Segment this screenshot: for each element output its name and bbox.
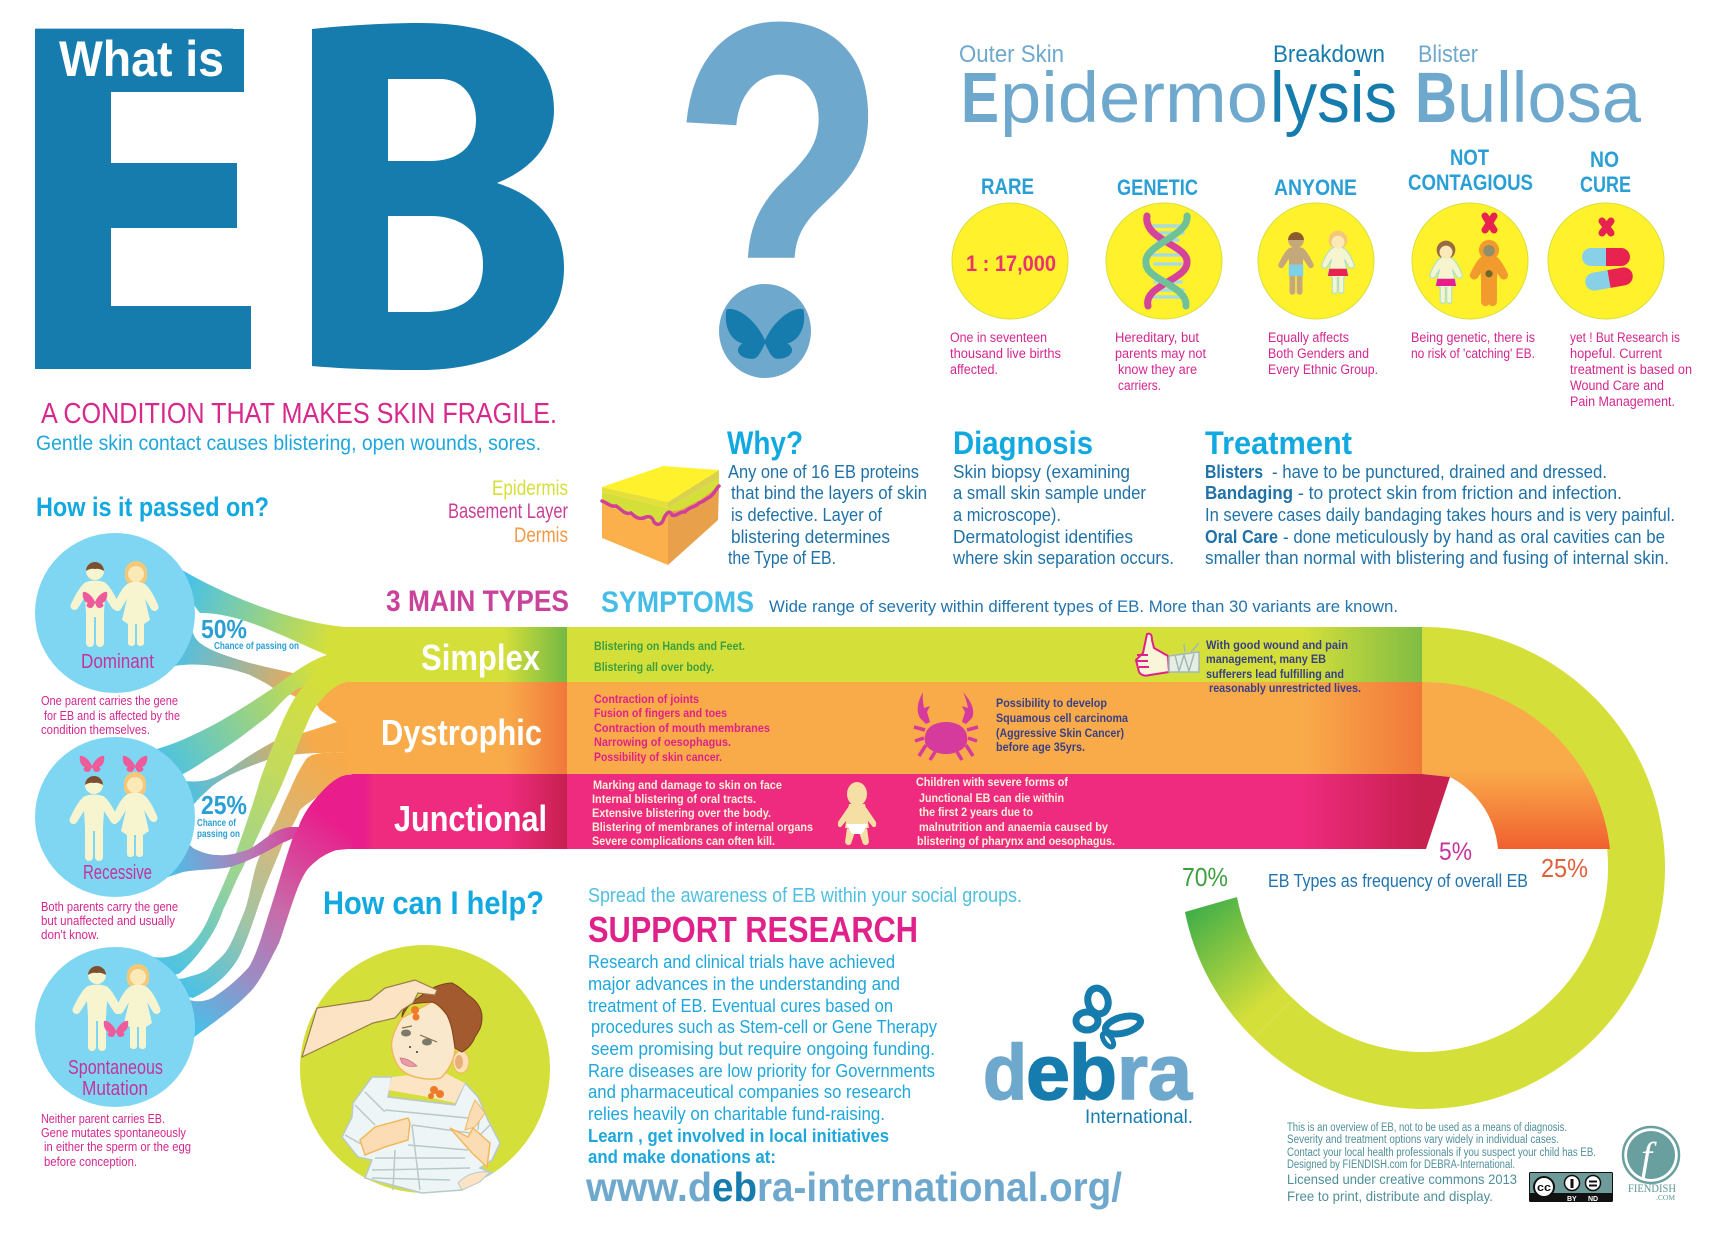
wordmark: d — [983, 1028, 1027, 1116]
headings: 3 main types and symptoms: SYMPTOMS — [601, 586, 754, 619]
disclaimer and licence: Free to print, distribute and display. — [1287, 1188, 1493, 1204]
caption: dominant: for EB and is affected by the — [44, 708, 180, 723]
body text: major advances in the understanding and — [588, 973, 900, 994]
note: good management — [1206, 638, 1361, 695]
box: What is: What is — [59, 31, 224, 87]
fact: no cure: yet ! But Research is — [1570, 330, 1680, 345]
meaning labels: Breakdown — [1273, 41, 1385, 68]
disclaimer and licence: Licensed under creative commons 2013 — [1287, 1171, 1517, 1187]
body text: Learn , get involved in local initiatives — [588, 1125, 889, 1146]
fact: anyone: ANYONE — [1274, 175, 1357, 200]
fact: no cure: CURE — [1580, 172, 1631, 197]
panel: Why?: Any one of 16 EB proteins — [728, 462, 919, 482]
website address: eb — [712, 1164, 757, 1210]
circle: dominant — [35, 533, 195, 693]
skin layer legend — [448, 477, 568, 547]
note: severe forms: Children with severe forms of — [916, 775, 1069, 789]
panel: Treatment: Bandaging — [1205, 483, 1293, 503]
icon: crab — [914, 692, 978, 760]
junctional symptoms — [592, 778, 813, 848]
tagline: Gentle skin contact causes blistering, open wounds, sores. — [36, 432, 541, 455]
dystrophic symptoms: Contraction of mouth membranes — [594, 721, 770, 735]
panel: Treatment: - have to be punctured, drained and dressed. — [1272, 462, 1607, 482]
panel: Why?: blistering determines — [731, 527, 890, 547]
fact: genetic: GENETIC — [1117, 175, 1198, 200]
body text: relies heavily on charitable fund-raising. — [588, 1103, 885, 1124]
dystrophic symptoms: Narrowing of oesophagus. — [594, 735, 731, 749]
website address — [585, 1164, 1122, 1210]
tagline: A CONDITION THAT MAKES SKIN FRAGILE. — [41, 398, 557, 430]
junctional symptoms: Internal blistering of oral tracts. — [592, 792, 756, 806]
chance: 25%: 25% — [201, 790, 247, 820]
note: good management: reasonably unrestricted lives. — [1209, 681, 1361, 695]
caption: spontaneous: Gene mutates spontaneously — [41, 1125, 186, 1140]
logo: fiendish: .COM — [1656, 1194, 1676, 1202]
circle: recessive — [35, 737, 195, 897]
junctional symptoms: Marking and damage to skin on face — [593, 778, 782, 792]
caption: spontaneous: Neither parent carries EB. — [41, 1111, 165, 1126]
butterfly mark — [1076, 986, 1142, 1049]
panel: Treatment: - to protect skin from friction and infection. — [1298, 483, 1622, 503]
fact: no cure: hopeful. Current — [1570, 346, 1662, 361]
simplex symptoms: Blistering all over body. — [594, 660, 714, 674]
fact: anyone: Both Genders and — [1268, 346, 1369, 361]
note: cancer risk: before age 35yrs. — [996, 740, 1085, 754]
icon: thumbs up with bandage — [1136, 634, 1199, 676]
head — [391, 983, 482, 1099]
logo: fiendish: FIENDISH — [1628, 1181, 1676, 1195]
label: 25%: 25% — [1541, 853, 1588, 883]
full name: E — [961, 59, 999, 138]
website address: www.d — [585, 1164, 712, 1210]
panel: how can I help — [300, 885, 1122, 1210]
title: big EB letters — [14, 0, 564, 470]
fact: genetic: parents may not — [1115, 346, 1206, 361]
caption: spontaneous: in either the sperm or the egg — [44, 1139, 191, 1154]
fact: not contagious — [1408, 145, 1535, 361]
segment: dystrophic 25% — [1422, 682, 1610, 849]
segment: junctional 5% — [1422, 774, 1450, 849]
full name: B — [1415, 59, 1457, 138]
fact: rare: affected. — [950, 362, 998, 377]
band: Junctional — [352, 774, 1422, 849]
fact: no cure — [1548, 147, 1692, 409]
junctional symptoms: Severe complications can often kill. — [592, 834, 775, 848]
panel: Diagnosis — [952, 425, 1174, 568]
panel: Treatment: smaller than normal with blistering and fusing of internal skin. — [1205, 548, 1669, 568]
hands — [360, 1118, 490, 1167]
headings: 3 main types and symptoms: 3 MAIN TYPES — [386, 585, 569, 618]
caption: recessive: don't know. — [41, 927, 99, 942]
note: good management: With good wound and pain — [1206, 638, 1348, 652]
band: Simplex — [340, 627, 1422, 682]
panel: Diagnosis: Dermatologist identifies — [953, 527, 1133, 547]
full name: ullosa — [1457, 59, 1642, 138]
note: range of severity: Wide range of severity within different types of EB. More than 30 variants are known. — [769, 597, 1398, 616]
panel: Why?: the Type of EB. — [728, 548, 836, 568]
badge: creative commons: ND — [1588, 1196, 1598, 1203]
skin layer legend: Basement Layer — [448, 500, 568, 523]
dystrophic symptoms: Fusion of fingers and toes — [594, 706, 727, 720]
prompt: Spread the awareness of EB within your social groups. — [588, 885, 1022, 907]
icon: cross and pills — [1582, 221, 1634, 292]
circle: recessive: Recessive — [83, 862, 152, 884]
band: Simplex: Simplex — [421, 637, 540, 678]
badge: creative commons: BY — [1567, 1196, 1577, 1203]
headings: 3 main types and symptoms — [386, 585, 754, 619]
icon: child and hazmat suit — [1430, 216, 1507, 305]
full name: pidermo — [1000, 59, 1268, 138]
fact: not contagious: Being genetic, there is — [1411, 330, 1535, 345]
simplex symptoms: Blistering on Hands and Feet. — [594, 639, 745, 653]
circle: spontaneous mutation: Mutation — [82, 1078, 148, 1100]
body text: treatment of EB. Eventual cures based on — [588, 995, 893, 1016]
chance: 50%: 50% — [201, 614, 247, 644]
note: cancer risk: (Aggressive Skin Cancer) — [996, 726, 1124, 740]
panel: Why? — [727, 425, 927, 568]
badge: creative commons — [1529, 1172, 1613, 1203]
fact: rare: 1 : 17,000 — [966, 251, 1056, 276]
junctional symptoms: Blistering of membranes of internal organs — [592, 820, 813, 834]
adult arm — [302, 980, 437, 1057]
dystrophic symptoms — [594, 692, 770, 764]
fact: genetic: carriers. — [1118, 378, 1161, 393]
chance: 25%: Chance of — [197, 817, 236, 829]
heading: How is it passed on? — [36, 492, 269, 522]
note: cancer risk: Squamous cell carcinoma — [996, 711, 1128, 725]
logo: fiendish: f — [1641, 1134, 1657, 1179]
panel: Diagnosis: a small skin sample under — [953, 483, 1146, 503]
disclaimer and licence: This is an overview of EB, not to be used as a means of diagnosis. — [1287, 1122, 1567, 1134]
chance: 50%: Chance of passing on — [214, 640, 299, 652]
panel: how is it passed on — [35, 492, 360, 1169]
fact: no cure: Wound Care and — [1570, 378, 1664, 393]
disclaimer and licence: Contact your local health professionals if you suspect your child has EB. — [1287, 1147, 1596, 1159]
tagline — [36, 398, 557, 455]
fact: rare — [950, 174, 1068, 377]
logo: debra international: International. — [1085, 1107, 1193, 1128]
wordmark: ra — [1117, 1028, 1193, 1116]
body text: Research and clinical trials have achieved — [588, 951, 895, 972]
panel: Treatment: Treatment — [1205, 425, 1352, 461]
chance: 25%: passing on — [197, 828, 240, 840]
note: severe forms: Junctional EB can die within — [919, 791, 1064, 805]
icon: baby — [838, 782, 876, 845]
caption: spontaneous: before conception. — [44, 1154, 137, 1169]
note: good management: management, many EB — [1206, 652, 1326, 666]
disclaimer and licence: Designed by FIENDISH.com for DEBRA-International. — [1287, 1159, 1515, 1171]
disclaimer and licence — [1287, 1122, 1596, 1204]
panel: Treatment — [1205, 425, 1675, 568]
disclaimer and licence: Severity and treatment options vary widely in individual cases. — [1287, 1134, 1559, 1146]
fact: not contagious: NOT — [1450, 145, 1489, 170]
fact: rare: One in seventeen — [950, 330, 1047, 345]
fact: not contagious: no risk of 'catching' EB. — [1411, 346, 1535, 361]
caption: dominant — [41, 693, 180, 737]
body bandages — [342, 1073, 500, 1193]
fact: no cure: treatment is based on — [1570, 362, 1692, 377]
label: 5%: 5% — [1439, 838, 1472, 866]
caption: recessive: but unaffected and usually — [41, 913, 175, 928]
fact: genetic: Hereditary, but — [1115, 330, 1199, 345]
illustration: bandaged child — [300, 945, 550, 1193]
dystrophic symptoms: Possibility of skin cancer. — [594, 750, 722, 764]
simplex symptoms — [594, 639, 745, 674]
inheritance ribbons — [145, 570, 360, 1038]
junctional symptoms: Extensive blistering over the body. — [592, 806, 771, 820]
logo: fiendish — [1623, 1127, 1679, 1202]
panel: Why?: is defective. Layer of — [731, 505, 883, 525]
caption: spontaneous — [41, 1111, 191, 1169]
fact: anyone: Equally affects — [1268, 330, 1349, 345]
icon: DNA helix — [1146, 216, 1187, 306]
body text: and make donations at: — [588, 1146, 776, 1167]
heading: How can I help? — [323, 885, 544, 921]
meaning labels: Outer Skin — [959, 41, 1064, 68]
caption: dominant: One parent carries the gene — [41, 693, 178, 708]
panel: Diagnosis: Diagnosis — [953, 425, 1093, 461]
note: good management: sufferers lead fulfilling and — [1206, 667, 1344, 681]
note: severe forms: malnutrition and anaemia caused by — [919, 820, 1108, 834]
panel: Diagnosis: where skin separation occurs. — [952, 548, 1174, 568]
panel: Treatment: In severe cases daily bandaging takes hours and is very painful. — [1205, 505, 1675, 525]
caption: chart: EB Types as frequency of overall EB — [1268, 871, 1528, 891]
wordmark: b — [1069, 1028, 1117, 1116]
fact: genetic: know they are — [1118, 362, 1197, 377]
circle: dominant: Dominant — [81, 651, 154, 673]
icon: skin cube — [602, 466, 719, 565]
name breakdown: Epidermolysis Bullosa — [959, 41, 1642, 138]
subheading: SUPPORT RESEARCH — [588, 909, 918, 950]
panel: Treatment: Blisters — [1205, 462, 1263, 482]
body text: seem promising but require ongoing funding. — [591, 1038, 935, 1059]
fact: no cure: Pain Management. — [1570, 394, 1675, 409]
note: cancer risk — [996, 696, 1128, 754]
panel: Diagnosis: a microscope). — [953, 505, 1061, 525]
caption: dominant: condition themselves. — [41, 722, 150, 737]
label: 70%: 70% — [1182, 862, 1228, 892]
dystrophic symptoms: Contraction of joints — [594, 692, 699, 706]
full name: lysis — [1270, 59, 1397, 138]
note: severe forms: blistering of pharynx and oesophagus. — [917, 834, 1115, 848]
skin layer legend: Epidermis — [492, 477, 568, 500]
full name — [961, 59, 1642, 138]
note: cancer risk: Possibility to develop — [996, 696, 1107, 710]
chance: 25% — [197, 790, 247, 840]
wordmark — [983, 1028, 1193, 1116]
fact: rare: thousand live births — [950, 346, 1061, 361]
circle: spontaneous mutation: Spontaneous — [68, 1057, 163, 1079]
panel: Why?: that bind the layers of skin — [731, 483, 927, 503]
fact: anyone — [1258, 175, 1378, 377]
body text — [588, 951, 938, 1167]
fact: no cure: NO — [1590, 147, 1619, 172]
wordmark: e — [1026, 1028, 1070, 1116]
panel: Treatment: Oral Care — [1205, 527, 1278, 547]
segment: simplex 70% — [1185, 627, 1665, 1109]
circle: spontaneous mutation — [35, 947, 195, 1107]
note: severe forms — [916, 775, 1115, 848]
meaning labels — [959, 41, 1478, 68]
chart: frequency ring — [1182, 627, 1665, 1109]
body text: and pharmaceutical companies so research — [588, 1081, 911, 1102]
meaning labels: Blister — [1418, 41, 1478, 68]
logo: debra international — [983, 986, 1193, 1128]
body text: procedures such as Stem-cell or Gene Therapy — [591, 1016, 938, 1037]
band: Junctional: Junctional — [394, 798, 547, 839]
band: Dystrophic: Dystrophic — [381, 712, 542, 753]
website address: ra-international.org/ — [757, 1164, 1122, 1210]
panel: Treatment: - done meticulously by hand as oral cavities can be — [1283, 527, 1665, 547]
band: Dystrophic — [346, 682, 1422, 774]
fact: rare: RARE — [981, 174, 1034, 199]
fact: not contagious: CONTAGIOUS — [1408, 170, 1533, 195]
badge: creative commons: cc — [1537, 1182, 1551, 1194]
caption: recessive: Both parents carry the gene — [41, 899, 178, 914]
fact: anyone: Every Ethnic Group. — [1268, 362, 1378, 377]
note: severe forms: the first 2 years due to — [919, 805, 1033, 819]
panel: Diagnosis: Skin biopsy (examining — [953, 462, 1130, 482]
chance: 50% — [201, 614, 299, 652]
fact: genetic — [1106, 175, 1222, 393]
skin layer legend: Dermis — [514, 524, 568, 547]
caption: recessive — [41, 899, 178, 942]
panel: Why?: Why? — [727, 425, 803, 461]
icon: boy and girl — [1278, 231, 1354, 295]
body text: Rare diseases are low priority for Governments — [588, 1060, 935, 1081]
